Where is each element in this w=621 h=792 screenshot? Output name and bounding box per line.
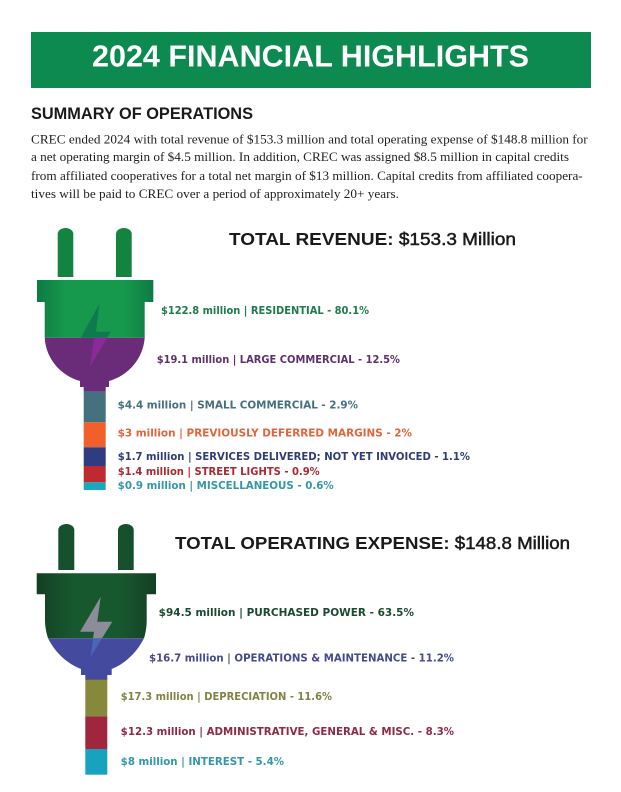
- summary text block: a net operating margin of $4.5 million. In addition, CREC was assigned $8.5 million in capital credits: [31, 150, 569, 164]
- summary text block: from affiliated cooperatives for a total net margin of $13 million. Capital credits from affiliated coopera-: [31, 169, 583, 183]
- icon: plug prongs: [58, 524, 134, 570]
- revenue labels: $19.1 million | LARGE COMMERCIAL - 12.5%: [157, 355, 400, 366]
- revenue labels: $1.7 million | SERVICES DELIVERED; NOT YET INVOICED - 1.1%: [118, 452, 470, 463]
- summary text block: CREC ended 2024 with total revenue of $153.3 million and total operating expense of $148.8 million for: [31, 132, 589, 146]
- segment: depreciation: [85, 680, 107, 716]
- heading: summary of operations: SUMMARY OF OPERATIONS: [31, 104, 253, 123]
- chart: revenue plug: [37, 228, 153, 490]
- segment: street lights: [84, 466, 106, 482]
- segment: residential: [37, 280, 153, 338]
- revenue labels: [118, 306, 470, 492]
- summary text block: tives will be paid to CREC over a period of approximately 20+ years.: [31, 187, 399, 201]
- title banner: [31, 32, 591, 88]
- summary text block: [31, 132, 589, 201]
- expense labels: [121, 608, 454, 768]
- expense labels: $8 million | INTEREST - 5.4%: [121, 757, 284, 768]
- segment: services delivered: [84, 447, 106, 466]
- icon: plug prongs: [58, 228, 132, 277]
- title banner: 2024 FINANCIAL HIGHLIGHTS: [92, 39, 529, 74]
- heading: total operating expense: TOTAL OPERATING EXPENSE: $148.8 Million: [175, 533, 570, 553]
- chart: expense plug: [37, 524, 156, 775]
- expense labels: $16.7 million | OPERATIONS & MAINTENANCE - 11.2%: [149, 653, 454, 664]
- expense labels: $94.5 million | PURCHASED POWER - 63.5%: [159, 608, 414, 619]
- segment: small commercial: [84, 392, 106, 422]
- segment: operations and maintenance: [48, 638, 144, 680]
- segment: administrative: [85, 716, 107, 749]
- segment: purchased power: [37, 573, 156, 638]
- segment: previously deferred margins: [84, 422, 106, 447]
- segment: large commercial: [45, 338, 145, 392]
- segment: miscellaneous: [84, 482, 106, 490]
- revenue labels: $3 million | PREVIOUSLY DEFERRED MARGINS - 2%: [118, 429, 412, 440]
- expense labels: $12.3 million | ADMINISTRATIVE, GENERAL & MISC. - 8.3%: [121, 727, 454, 738]
- segment: interest: [85, 749, 107, 775]
- icon: lightning bolt: [80, 597, 112, 657]
- icon: lightning bolt: [81, 304, 111, 367]
- revenue labels: $4.4 million | SMALL COMMERCIAL - 2.9%: [118, 401, 358, 412]
- heading: total revenue: TOTAL REVENUE: $153.3 Million: [229, 229, 516, 249]
- revenue labels: $122.8 million | RESIDENTIAL - 80.1%: [161, 306, 369, 317]
- revenue labels: $0.9 million | MISCELLANEOUS - 0.6%: [118, 481, 334, 492]
- expense labels: $17.3 million | DEPRECIATION - 11.6%: [121, 692, 332, 703]
- revenue labels: $1.4 million | STREET LIGHTS - 0.9%: [118, 467, 320, 478]
